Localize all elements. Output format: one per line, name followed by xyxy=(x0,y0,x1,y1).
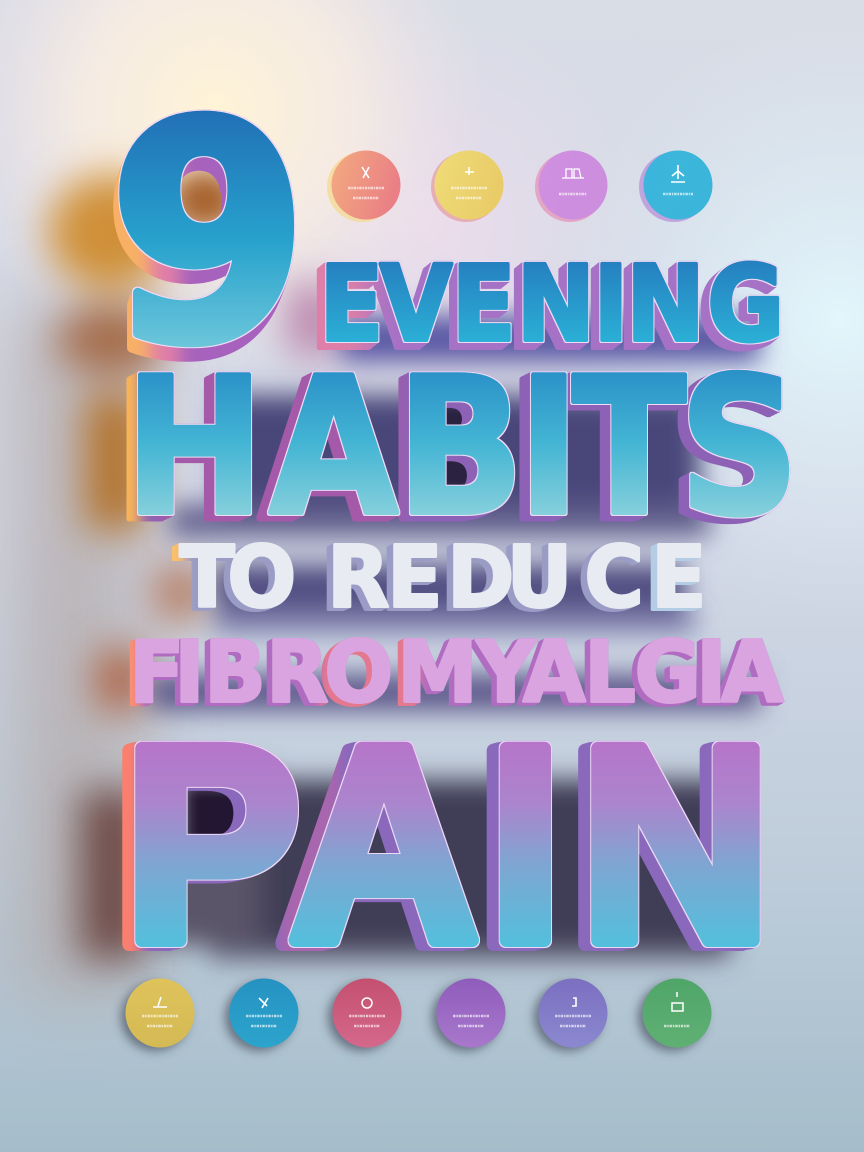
word: PAIN: PAIN xyxy=(124,690,771,999)
badge: coral xyxy=(327,150,400,222)
badge: green xyxy=(642,978,712,1048)
line: TO REDUCE: TO REDUCE xyxy=(180,528,706,627)
badge: purple xyxy=(436,978,506,1048)
numeral 9: 9 xyxy=(109,60,308,410)
badge: yellow xyxy=(431,150,504,222)
badge: gold xyxy=(126,978,194,1048)
word: HABITS: HABITS xyxy=(125,337,799,557)
bottom row of habit badges xyxy=(121,978,712,1051)
badge: lilac xyxy=(535,150,608,222)
word: FIBROMYALGIA: FIBROMYALGIA xyxy=(129,623,784,722)
word: EVENING: EVENING xyxy=(320,244,784,365)
badge: blue xyxy=(230,978,298,1048)
badge: indigo xyxy=(538,978,608,1048)
badge: cyan xyxy=(639,150,712,222)
badge: rose xyxy=(332,978,402,1048)
top row of habit badges xyxy=(327,150,712,222)
cast shadows behind the lettering xyxy=(10,170,760,1000)
